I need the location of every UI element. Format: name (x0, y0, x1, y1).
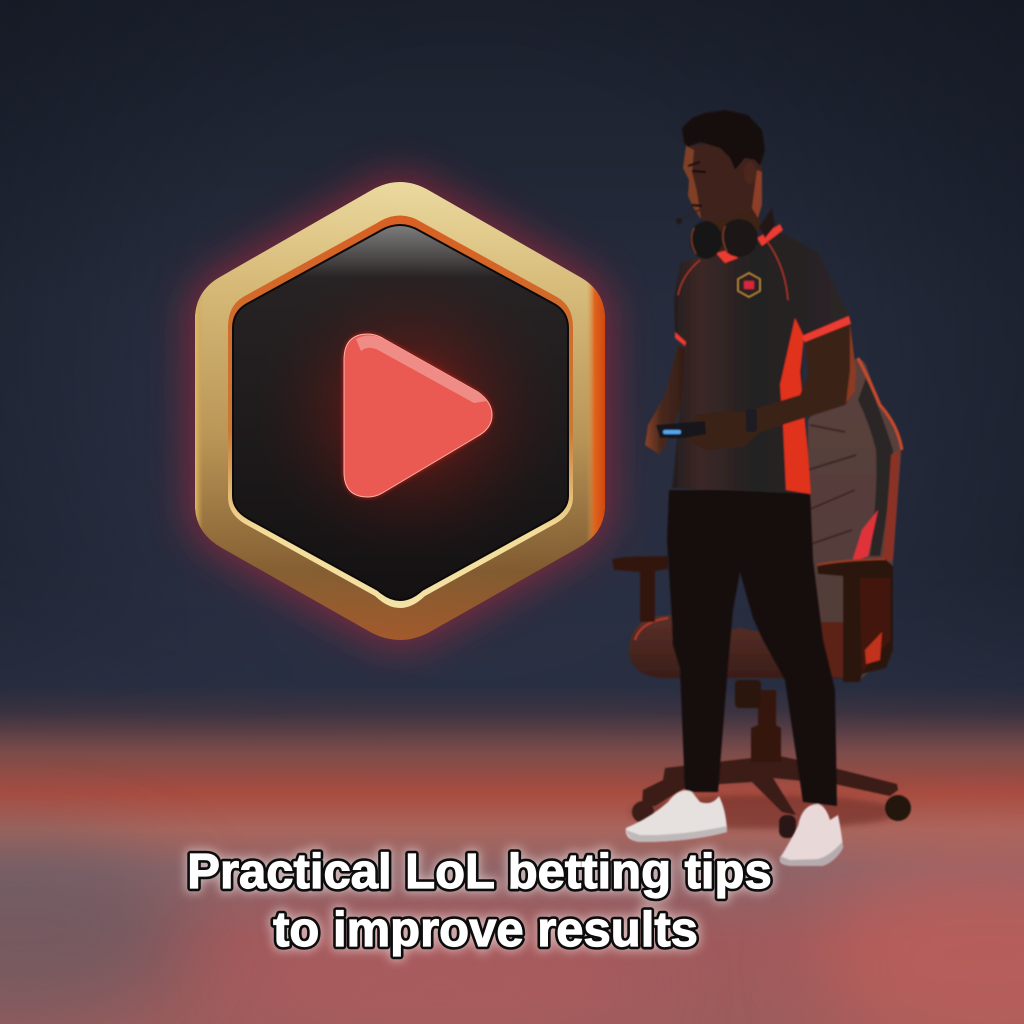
caption outline (187, 845, 772, 957)
far forearm and hand (645, 345, 690, 455)
hexagon play badge (195, 182, 605, 640)
player (626, 110, 856, 866)
headset around neck (676, 208, 775, 259)
chair armrests (612, 556, 893, 682)
near arm and hand (686, 324, 855, 450)
caption white halo: Practical LoL betting tips (187, 845, 772, 899)
left sneaker (626, 790, 727, 842)
jersey hexagon crest (738, 273, 760, 297)
gold outer frame (195, 182, 605, 640)
caption outline: Practical LoL betting tips (187, 845, 772, 899)
floor shadow (630, 795, 900, 829)
caption line 1: Practical LoL betting tips (187, 845, 772, 899)
caption white halo (187, 845, 772, 957)
head (682, 110, 765, 222)
chair backrest (806, 358, 902, 680)
chair base and casters (632, 756, 911, 838)
caption white halo: to improve results (273, 903, 698, 957)
chair seat (629, 615, 846, 678)
orange and pale inner lip (228, 216, 573, 608)
hair (682, 110, 765, 170)
game controller (656, 421, 706, 438)
black glass panel (233, 225, 568, 600)
jersey (672, 224, 851, 494)
title caption (187, 845, 772, 957)
trousers (667, 490, 837, 806)
caption line 2: to improve results (273, 903, 698, 957)
play triangle (344, 334, 492, 497)
wrist watch (746, 409, 757, 432)
right sneaker (780, 804, 843, 866)
caption outline: to improve results (273, 903, 698, 957)
chair stem (751, 690, 781, 762)
neck (705, 200, 762, 255)
red glow behind badge (195, 182, 605, 640)
gaming chair (612, 358, 911, 838)
